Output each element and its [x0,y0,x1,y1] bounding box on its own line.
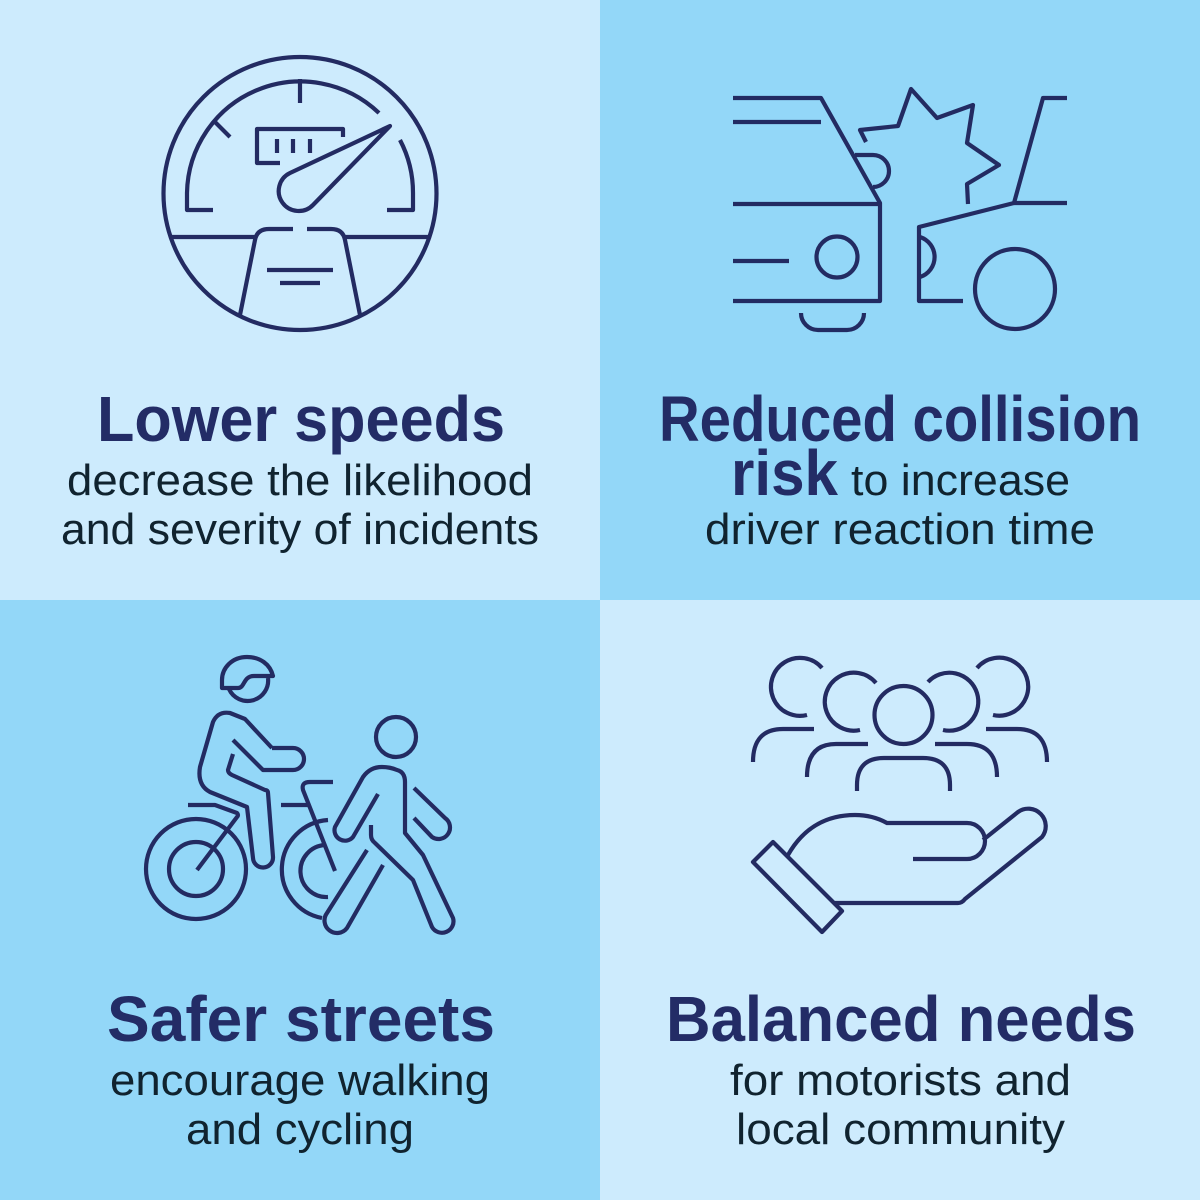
icon: speedometer [164,57,436,330]
panel: balanced needs [600,600,1200,1200]
text: lower speeds description: decrease the likelihood [67,456,533,505]
text: balanced needs description: for motorists and [730,1056,1071,1105]
heading: reduced collision risk: risk [731,437,838,509]
heading: safer streets: Safer streets [107,983,495,1055]
text: lower speeds description [61,456,539,554]
text: reduced collision description [705,456,1095,554]
text: safer streets description: encourage walking [110,1056,490,1105]
heading: balanced needs: Balanced needs [666,983,1136,1055]
panel: safer streets [0,600,600,1200]
text: reduced collision description: driver reaction time [705,505,1095,554]
text: safer streets description [110,1056,490,1154]
heading: reduced collision risk: Reduced collision [659,383,1141,455]
icon: hand holding community [753,658,1047,932]
icon: cyclist and pedestrian [146,657,453,933]
text: reduced collision description: to increase [851,456,1070,505]
panel: lower speeds [0,0,600,600]
panel: reduced collision risk [600,0,1200,600]
icon: car collision [733,89,1067,330]
text: safer streets description: and cycling [186,1105,414,1154]
text: lower speeds description: and severity of incidents [61,505,539,554]
text: balanced needs description: local community [736,1105,1065,1154]
heading: reduced collision risk [659,383,1141,509]
text: balanced needs description [730,1056,1071,1154]
heading: lower speeds: Lower speeds [97,383,505,455]
